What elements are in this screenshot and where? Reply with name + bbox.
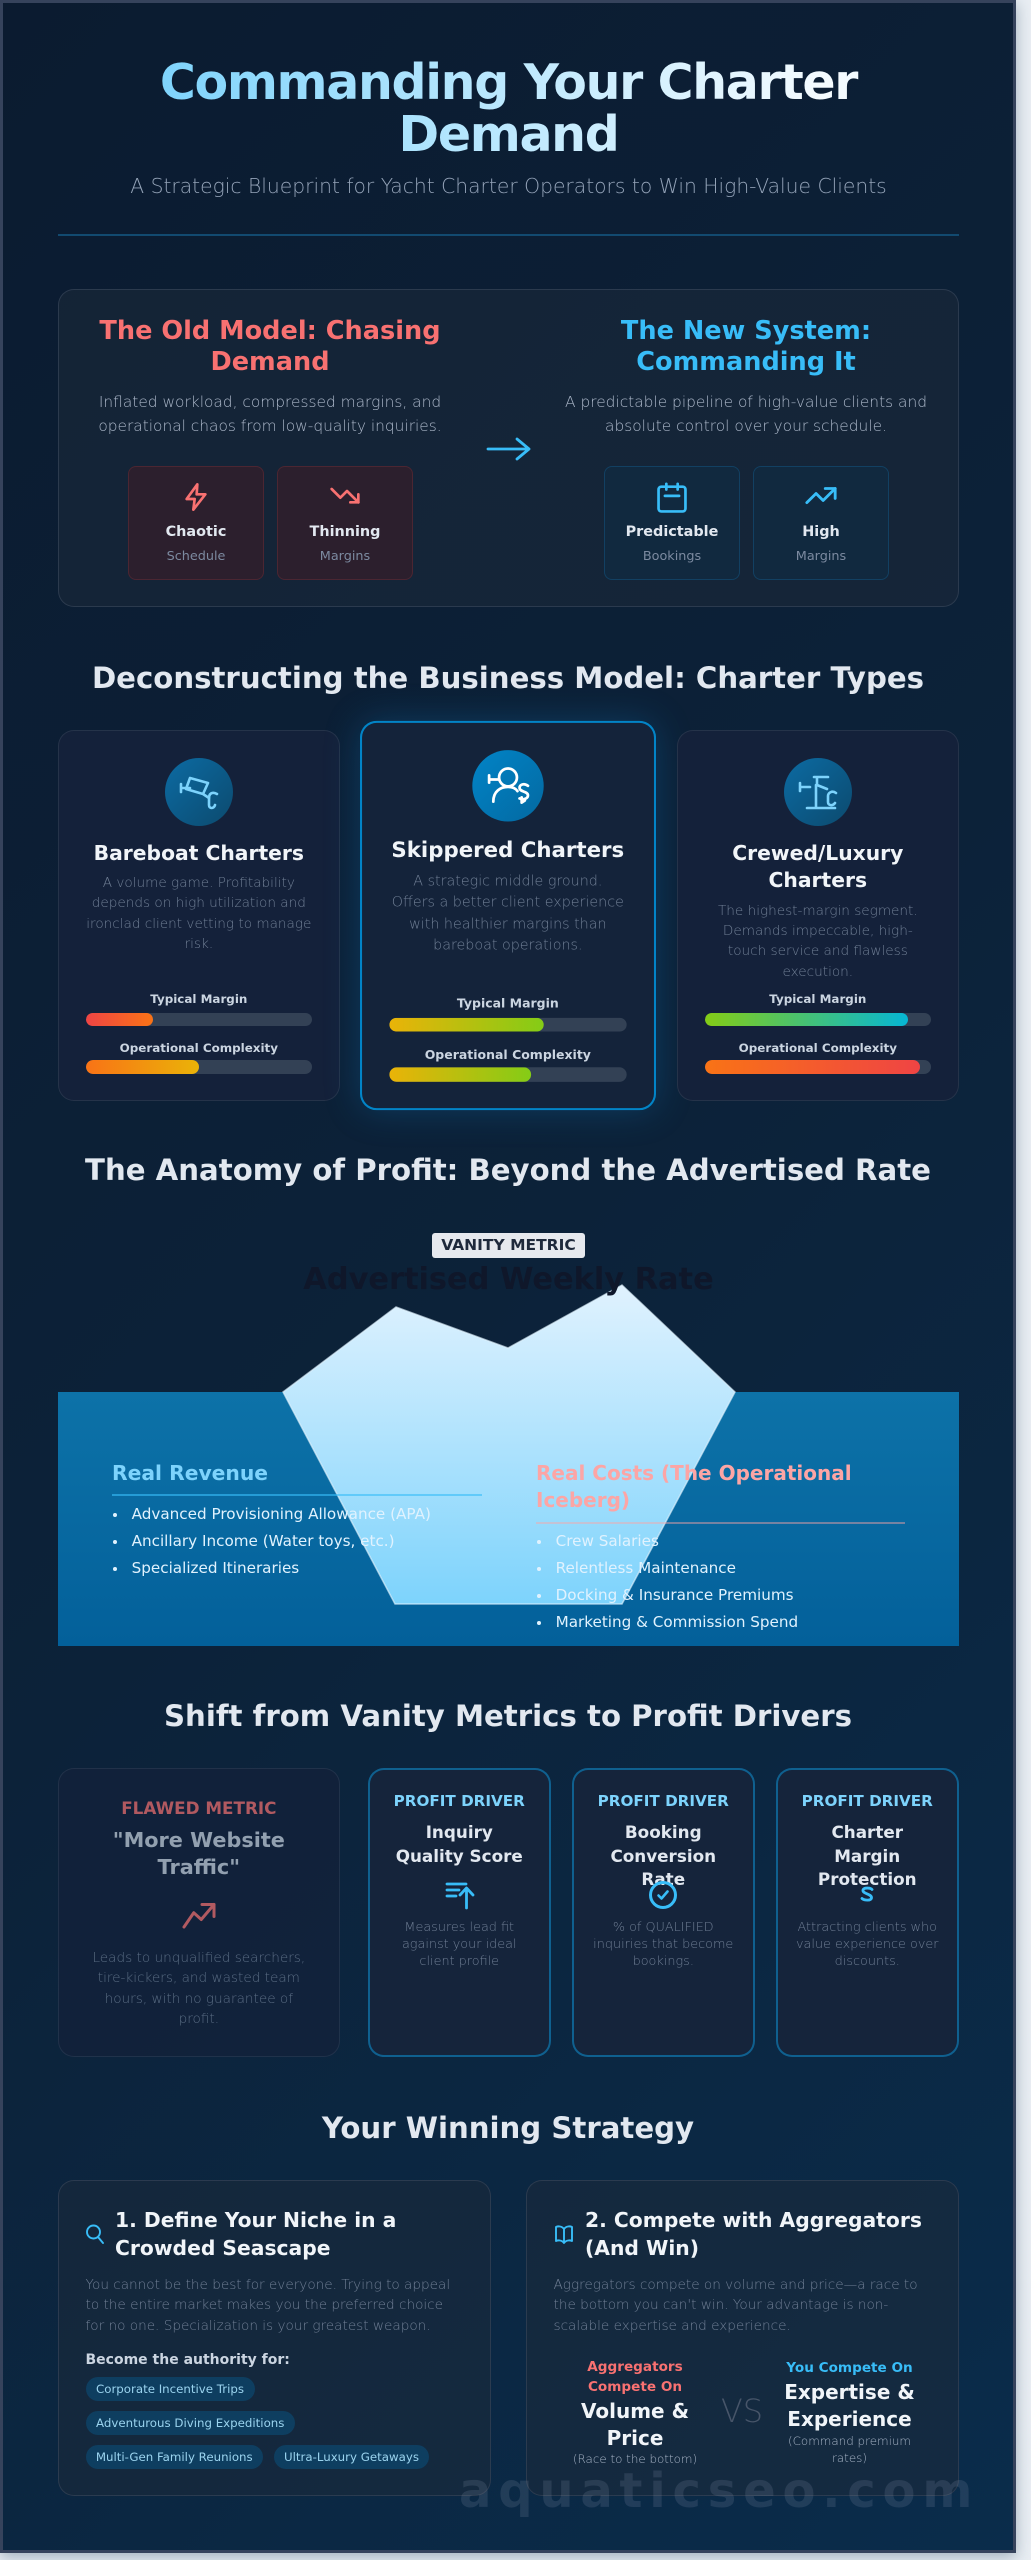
description [796,1920,939,1968]
pill [86,2445,263,2469]
note [770,2432,930,2466]
water [58,1392,959,1646]
label: authority: Become the authority for: [86,2352,290,2368]
description [593,1920,733,1968]
pill: Multi-Gen Family Reunions [96,2450,253,2464]
heading: Real Revenue [112,1461,268,1485]
heading: old model [99,316,441,376]
card: flawed metric [58,1768,340,2057]
description: to the entire market makes you the preferred choice [86,2297,443,2313]
description: the bottom you can't win. Your advantage is non- [554,2297,888,2313]
description: A strategic middle ground. [413,873,602,890]
description: client profile [419,1954,499,1968]
description: for no one. Specialization is your greatest weapon. [86,2318,431,2334]
pill: Adventurous Diving Expeditions [96,2416,284,2430]
label [587,2359,683,2395]
icon: search [86,2224,104,2244]
heading: new system: The New System: [621,316,871,346]
card: crewed/luxury charters [677,730,959,1101]
title: Conversion [610,1846,716,1866]
title [113,1828,285,1878]
description: Demands impeccable, high- [723,923,913,939]
card: chaotic schedule [128,466,264,580]
description: bareboat operations. [433,937,582,954]
bar: typical margin 30% [86,1012,312,1026]
title: 1. Define Your Niche in a [115,2208,396,2232]
list: cost items: Docking & Insurance Premiums [556,1586,794,1604]
description: touch service and flawless [728,943,908,959]
bar: complexity 95% [704,1060,931,1074]
list: cost items: Relentless Maintenance [556,1558,736,1576]
description: value experience over [796,1936,939,1952]
description [392,873,624,954]
description [718,902,918,980]
icon: bareboat [165,758,233,826]
description: ironclad client vetting to manage [86,916,311,932]
pill [86,2411,295,2435]
description [86,875,311,952]
icon: dollar sign [860,1886,874,1902]
description: risk. [184,936,213,952]
title [585,2208,922,2260]
heading: new system [621,316,871,376]
list: revenue items [113,1504,431,1576]
title: (And Win) [585,2236,699,2260]
value: Volume & [581,2398,689,2422]
heading: vanity metrics vs profit drivers: Shift from Vanity Metrics to Profit Drivers [164,1699,852,1733]
list: revenue items: Specialized Itineraries [132,1558,299,1576]
label: PROFIT DRIVER [394,1792,525,1810]
heading: Real Costs (The Operational [536,1461,852,1485]
bar: typical margin 90% [704,1012,931,1026]
description: depends on high utilization and [92,895,306,911]
value: Price [607,2426,663,2450]
subtitle: A Strategic Blueprint for Yacht Charter Operators to Win High-Value Clients [130,174,887,198]
icon: bars arrow up [446,1882,474,1910]
title: 2. Compete with Aggregators [585,2208,922,2232]
title: Charter [831,1822,903,1842]
card: predictable bookings [604,466,740,580]
watermark: aquaticseo.com [459,2463,979,2519]
title: Inquiry [426,1822,493,1842]
label: typical margin: Typical Margin [457,996,559,1011]
card: thinning margins: Thinning [310,524,380,540]
card: booking conversion rate [572,1768,755,2057]
bar: complexity 50% [86,1060,312,1074]
description: Offers a better client experience [392,894,624,911]
value: Expertise & [784,2380,915,2404]
heading: Iceberg) [536,1488,630,1512]
list: revenue items: Advanced Provisioning Allowance (APA) [132,1504,431,1522]
card: bareboat charters [58,730,340,1101]
title: Crewed/Luxury [732,840,903,864]
card: high margins: Margins [796,549,846,564]
arrow: old to new [486,438,530,460]
description: hours, with no guarantee of [105,1991,293,2007]
label: typical margin: Typical Margin [150,992,247,1006]
title [610,1822,716,1889]
pill: Ultra-Luxury Getaways [284,2450,419,2464]
description [402,1920,517,1968]
label: operational complexity: Operational Complexity [739,1041,897,1055]
iceberg [282,1284,736,1605]
tag: vanity metric: VANITY METRIC [441,1236,576,1254]
label: You Compete On [786,2360,913,2376]
title [818,1822,917,1889]
label: operational complexity: Operational Complexity [120,1041,278,1055]
card: high margins: High [802,524,840,540]
title: Bareboat Charters [94,840,304,864]
text: old model description: operational chaos from low-quality inquiries. [98,417,442,435]
icon: skipper [472,750,543,822]
value [770,2378,930,2432]
column: real revenue [112,1461,482,1576]
description: against your ideal [402,1936,517,1952]
card: chaotic schedule: Schedule [167,549,225,564]
title: Protection [818,1869,917,1889]
description: scalable expertise and experience. [554,2318,791,2334]
icon: trending up [182,1902,216,1929]
list: revenue items: Ancillary Income (Water toys, etc.) [132,1532,395,1550]
description [92,1950,305,2027]
text: old model description [98,393,442,435]
column: real costs [536,1461,905,1630]
pill: Corporate Incentive Trips [96,2382,244,2396]
column: you [770,2358,930,2468]
label: operational complexity: Operational Complexity [425,1047,591,1062]
label: typical margin: Typical Margin [769,992,866,1006]
title: Demand [399,106,618,162]
title [58,57,959,160]
description: A volume game. Profitability [103,875,295,891]
title: Booking [625,1822,702,1842]
title [396,1822,523,1866]
title: "More Website [113,1828,285,1852]
icon: calendar [657,482,687,513]
pill [86,2377,254,2401]
note: (Race to the bottom) [573,2452,697,2466]
card: predictable bookings: Bookings [643,549,701,564]
label: PROFIT DRIVER [598,1792,729,1810]
tag: vanity metric [432,1233,585,1258]
title: Crowded Seascape [115,2236,331,2260]
list: cost items: Crew Salaries [556,1532,659,1550]
title: Quality Score [396,1846,523,1866]
title: Charters [769,868,867,892]
panel: old model vs new system [58,289,959,607]
card: chaotic schedule: Chaotic [166,524,226,540]
heading: anatomy of profit: The Anatomy of Profit: Beyond the Advertised Rate [85,1153,931,1187]
label: VS: VS [721,2392,763,2430]
description: Leads to unqualified searchers, [92,1950,305,1966]
text: new system description [565,393,927,435]
description: The highest-margin segment. [718,902,918,918]
note: rates) [832,2450,867,2464]
heading: winning strategy: Your Winning Strategy [322,2111,694,2145]
heading: old model: The Old Model: Chasing [99,316,441,346]
description: bookings. [633,1954,694,1968]
description: You cannot be the best for everyone. Trying to appeal [86,2277,450,2293]
list: cost items [537,1532,798,1630]
label: Compete On [588,2379,682,2395]
pill [274,2445,429,2469]
description: % of QUALIFIED [613,1920,714,1934]
card: high margins [753,466,889,580]
label: PROFIT DRIVER [802,1792,933,1810]
icon: trending down [330,488,360,504]
text: new system description: A predictable pipeline of high-value clients and [565,393,927,411]
card: thinning margins: Margins [320,549,370,564]
text: old model description: Inflated workload, compressed margins, and [99,393,441,411]
heading [536,1461,852,1512]
label: advertised weekly rate: Advertised Weekly Rate [303,1262,714,1297]
text: new system description: absolute control over your schedule. [605,417,887,435]
title: Traffic" [158,1854,240,1878]
description [86,2277,450,2334]
title: Commanding Your Charter [160,54,857,111]
description: discounts. [835,1954,900,1968]
heading: charter types: Deconstructing the Business Model: Charter Types [92,661,924,695]
card: define your niche [58,2180,491,2496]
title: Skippered Charters [391,837,624,862]
description [554,2277,918,2334]
icon: luxury yacht [784,758,852,826]
description: execution. [783,964,853,980]
icon: check circle [649,1881,677,1909]
title [115,2208,396,2260]
icon: lightning bolt [185,483,207,511]
card: charter margin protection [776,1768,959,2057]
heading: new system: Commanding It [636,346,856,376]
label: FLAWED METRIC [121,1798,276,1818]
description: Measures lead fit [404,1920,514,1934]
card: compete with aggregators [526,2180,959,2496]
title: Margin [834,1846,900,1866]
list: cost items: Marketing & Commission Spend [556,1612,798,1630]
bar: complexity 60% [389,1067,627,1081]
value [555,2398,715,2452]
column: aggregators [573,2359,697,2466]
card: predictable bookings: Predictable [626,524,718,540]
description: Attracting clients who [798,1920,937,1934]
value: Experience [787,2406,912,2430]
heading: old model: Demand [210,346,330,376]
description: Aggregators compete on volume and price—a race to [554,2277,918,2293]
description: tire-kickers, and wasted team [98,1970,300,1986]
description: profit. [179,2011,219,2027]
description: inquiries that become [593,1936,733,1952]
label: Aggregators [587,2359,683,2375]
description: with healthier margins than [409,916,607,933]
title [732,840,903,892]
icon: trending up [805,487,837,504]
icon: book [555,2225,573,2244]
card: inquiry quality score [368,1768,551,2057]
title: Rate [641,1869,685,1889]
note: (Command premium [788,2434,911,2448]
panel: iceberg diagram [58,1233,959,1646]
card: thinning margins [277,466,413,580]
bar: typical margin 65% [389,1017,627,1032]
card: skippered charters (featured) [360,721,656,1110]
